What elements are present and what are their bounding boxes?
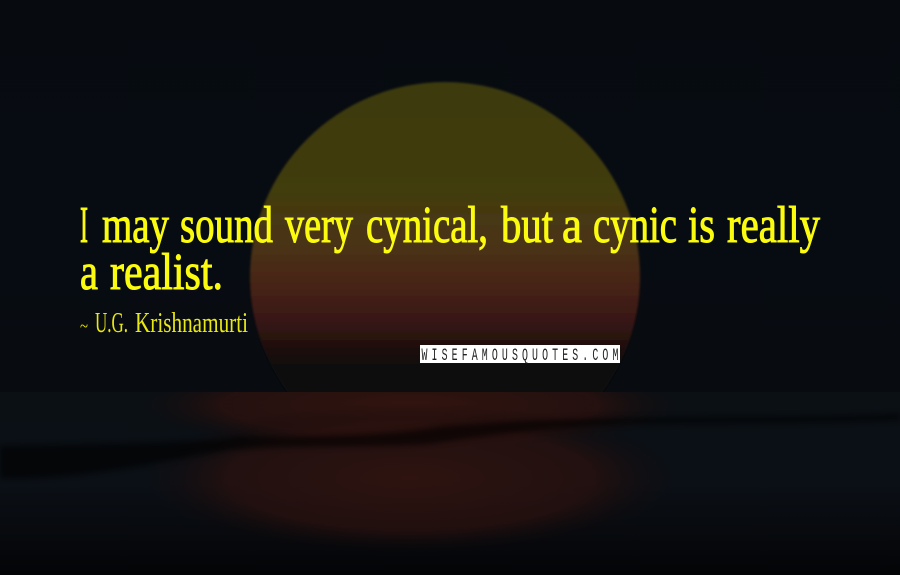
author attribution (80, 308, 248, 339)
author attribution: Krishnamurti (135, 308, 248, 339)
quote text: very (285, 197, 353, 254)
quote text: may (102, 197, 169, 254)
watermark logo: WISEFAMOUSQUOTES.COM (422, 346, 618, 366)
sun disc (249, 81, 641, 364)
sun reflection on water (1, 392, 897, 542)
quote text: but (501, 197, 553, 254)
quote text: cynical, (366, 197, 488, 254)
author attribution: ~ (80, 316, 88, 336)
quote text: I (80, 197, 88, 254)
quote text: sound (180, 197, 273, 254)
quote text: is (688, 197, 715, 254)
quote text: a (562, 197, 582, 254)
author attribution: U.G. (95, 308, 128, 339)
quote text (80, 197, 820, 301)
quote text: cynic (593, 197, 677, 254)
background: sea (0, 392, 900, 575)
quote text: a (80, 244, 98, 301)
quote text: realist. (110, 244, 223, 301)
quote text: really (727, 197, 820, 254)
background: night sky (0, 0, 900, 392)
